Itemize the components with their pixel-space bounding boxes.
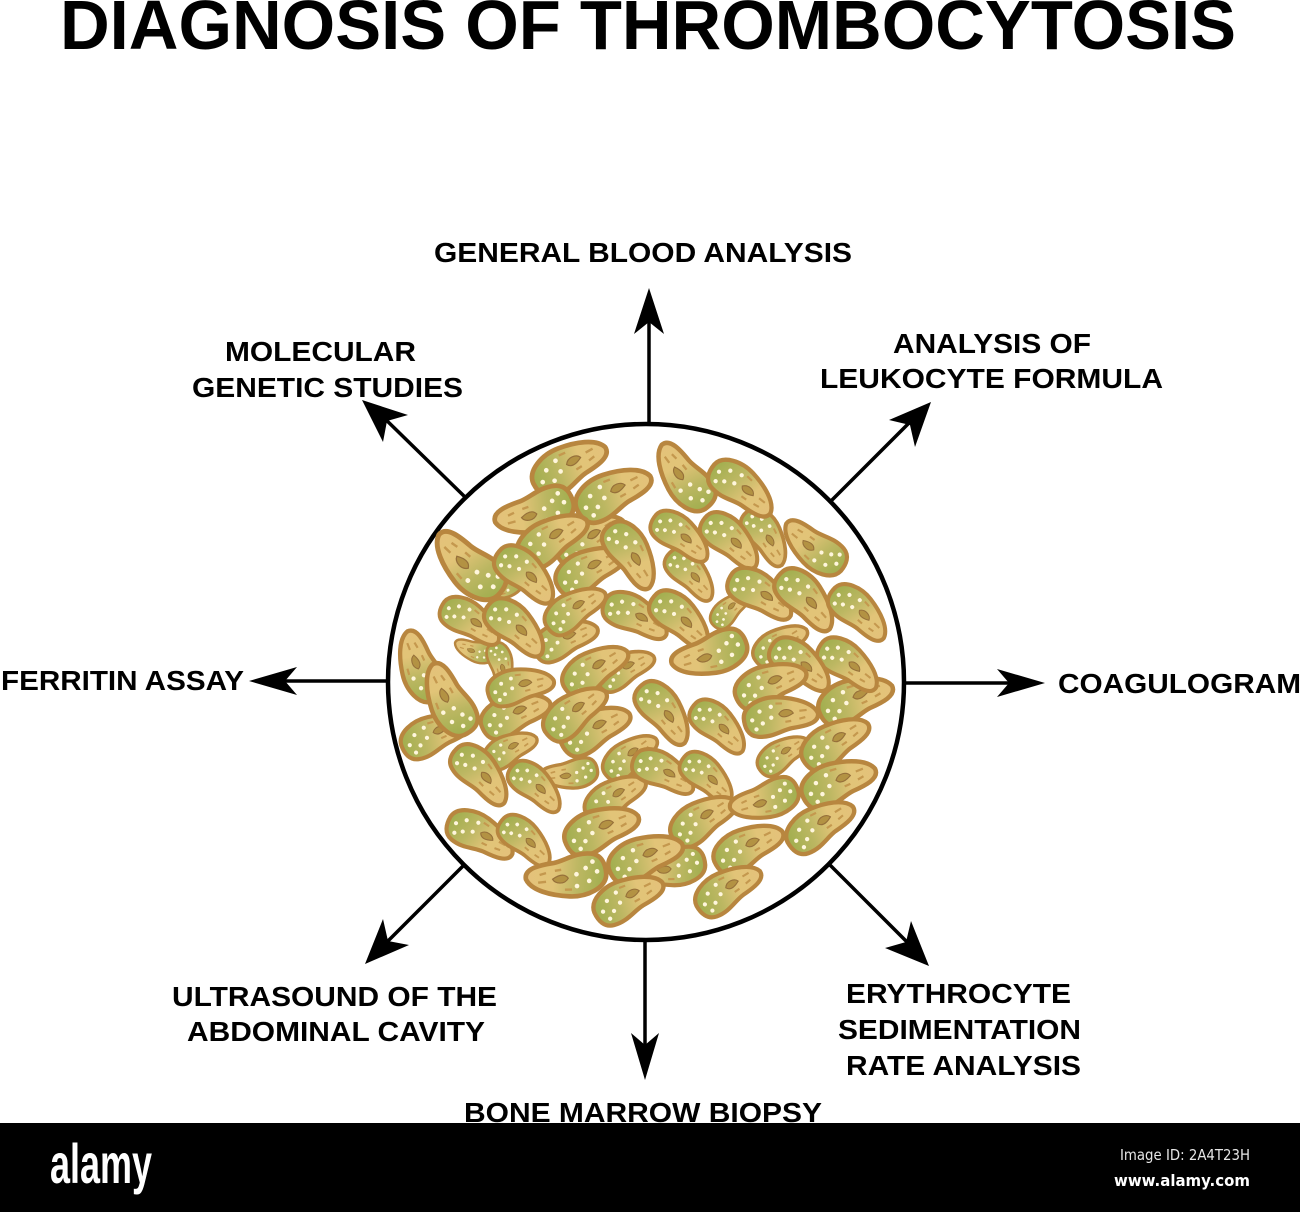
footer logo: alamy <box>50 1132 152 1195</box>
panel: central blood smear circle with platelets <box>388 424 904 940</box>
arrow: to ultrasound <box>365 866 463 964</box>
footer bar <box>0 1123 1300 1212</box>
label: erythrocyte sedimentation rate analysis: RATE ANALYSIS <box>846 1050 1081 1081</box>
label: molecular genetic studies <box>192 336 463 403</box>
label: coagulogram: COAGULOGRAM <box>1058 668 1300 699</box>
arrow: to molecular genetic studies <box>362 400 465 497</box>
label: analysis of leukocyte formula: LEUKOCYTE FORMULA <box>820 363 1163 394</box>
arrow: to ferritin assay <box>249 667 386 695</box>
label: erythrocyte sedimentation rate analysis: ERYTHROCYTE <box>846 978 1071 1009</box>
label: bone marrow biopsy: BONE MARROW BIOPSY <box>464 1097 822 1128</box>
label: general blood analysis: GENERAL BLOOD ANALYSIS <box>434 237 852 268</box>
label: ferritin assay: FERRITIN ASSAY <box>1 665 244 696</box>
platelet cells <box>395 432 898 929</box>
label: erythrocyte sedimentation rate analysis <box>838 978 1081 1081</box>
label: erythrocyte sedimentation rate analysis: SEDIMENTATION <box>838 1014 1081 1045</box>
footer image id: Image ID: 2A4T23H <box>1120 1146 1250 1164</box>
circle outline <box>388 424 904 940</box>
arrow: up to general blood analysis <box>634 288 664 424</box>
label: ultrasound of the abdominal cavity <box>172 981 497 1047</box>
label: analysis of leukocyte formula <box>820 328 1163 394</box>
arrow: to coagulogram <box>905 669 1045 697</box>
label: analysis of leukocyte formula: ANALYSIS OF <box>893 328 1091 359</box>
label: ultrasound of the abdominal cavity: ABDOMINAL CAVITY <box>187 1016 485 1047</box>
label: molecular genetic studies: MOLECULAR <box>225 336 416 367</box>
label: molecular genetic studies: GENETIC STUDIES <box>192 372 463 403</box>
footer url: www.alamy.com <box>1114 1171 1250 1190</box>
arrow: down to bone marrow biopsy <box>631 942 659 1080</box>
label: ultrasound of the abdominal cavity: ULTRASOUND OF THE <box>172 981 497 1012</box>
arrow: to erythrocyte sedimentation <box>830 865 929 966</box>
arrow: to leukocyte formula <box>831 402 931 501</box>
